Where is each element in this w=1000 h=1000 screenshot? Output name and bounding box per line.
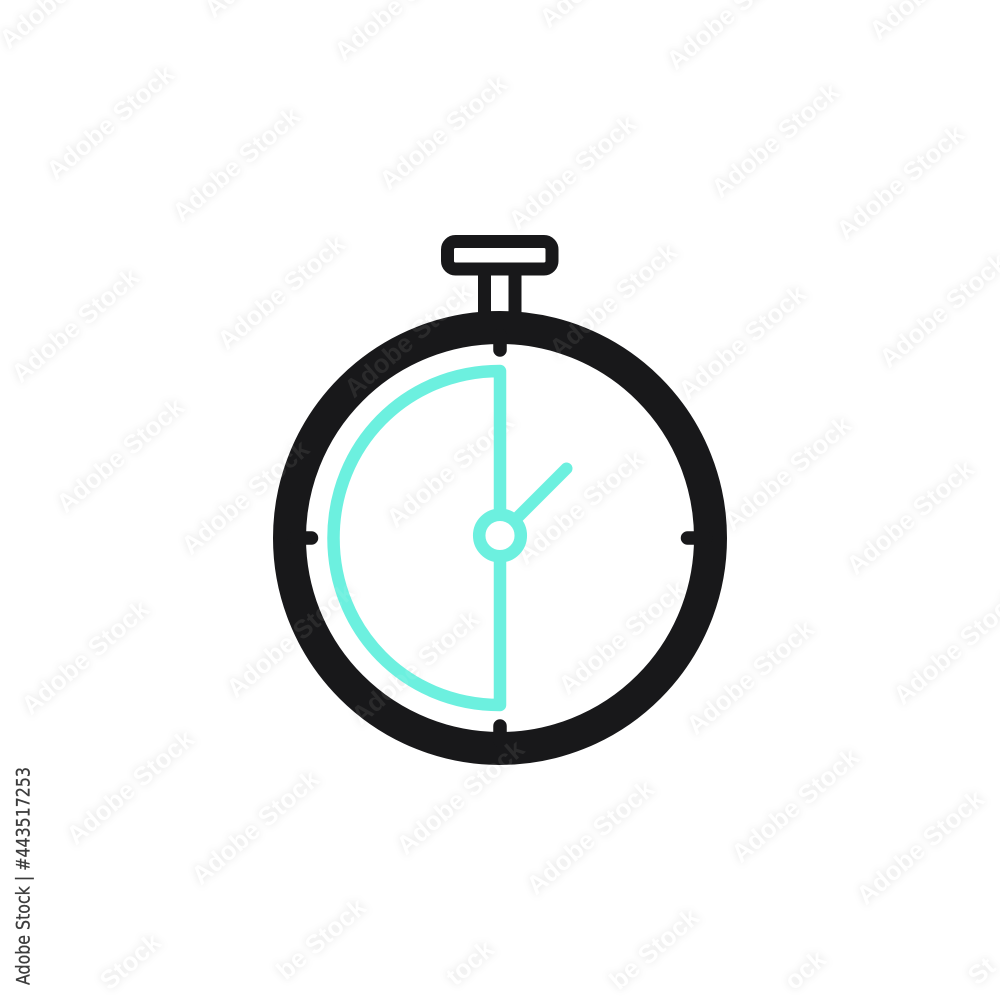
- watermark pattern: Adobe Stock: [338, 276, 478, 403]
- watermark over the icon: [175, 236, 857, 860]
- watermark pattern: Adobe Stock: [60, 723, 200, 850]
- icon: watch case ring: [290, 328, 710, 748]
- watermark over the icon: Adobe Stock: [175, 433, 315, 560]
- watermark pattern: Adobe Stock: [520, 773, 660, 900]
- watermark over the icon: Adobe Stock: [717, 409, 857, 536]
- watermark pattern: be Stock: [603, 901, 705, 995]
- watermark pattern: Adobe Stock: [830, 118, 970, 245]
- watermark pattern: Adobe Stock: [211, 228, 351, 355]
- watermark over the icon: Adobe Stock: [345, 603, 485, 730]
- watermark pattern: Adobe Stock: [220, 576, 360, 703]
- watermark pattern: Adobe Stock: [50, 391, 190, 518]
- watermark pattern: Adobe Stock: [5, 261, 145, 388]
- watermark pattern: ock: [778, 943, 832, 996]
- icon: clock hand: [514, 468, 566, 521]
- icon: crown stem: [484, 272, 515, 320]
- icon: half-dial elapsed sector: [334, 371, 500, 705]
- watermark pattern: Adobe Stock: [840, 453, 980, 580]
- icon: centre hub: [479, 515, 521, 556]
- icon: hour ticks: [294, 335, 706, 741]
- watermark pattern: Adobe Stock: [552, 573, 692, 700]
- watermark pattern: Adobe Stock: [510, 443, 650, 570]
- watermark pattern: Stock: [94, 926, 167, 996]
- watermark over the icon: Adobe Stock: [390, 733, 530, 860]
- watermark pattern: Adobe Stock: [345, 603, 485, 730]
- watermark pattern: Adobe Stock: [373, 68, 513, 195]
- watermark pattern: Adobe Stock: [543, 236, 683, 363]
- watermark pattern: Adobe Stock: [390, 733, 530, 860]
- watermark pattern: Adobe Stock: [705, 76, 845, 203]
- watermark pattern: Adobe Stock: [40, 58, 180, 185]
- watermark pattern: Adobe Stock: [850, 783, 990, 910]
- watermark pattern: St: [962, 951, 1000, 991]
- watermark pattern: Adobe Stock: [725, 741, 865, 868]
- watermark over the icon: Adobe Stock: [220, 576, 360, 703]
- watermark pattern: Adobe Stock: [717, 409, 857, 536]
- watermark pattern: Adobe Stock: [380, 406, 520, 533]
- watermark pattern: Adobe Stock: [185, 763, 325, 890]
- icon: stopwatch: [290, 242, 710, 748]
- icon: crown button: [448, 242, 552, 269]
- watermark pattern: Adobe Stock: [15, 593, 155, 720]
- watermark over the icon: Adobe Stock: [338, 276, 478, 403]
- image id caption: Adobe Stock | #443517253: [14, 767, 34, 985]
- watermark over the icon: Adobe Stock: [543, 236, 683, 363]
- watermark pattern: Adobe Stock: [680, 613, 820, 740]
- watermark pattern: Adobe Stock: [502, 108, 642, 235]
- watermark pattern: be Stock: [270, 891, 372, 985]
- watermark pattern: Adobe Stock: [175, 433, 315, 560]
- watermark pattern: tock: [440, 933, 500, 991]
- watermark pattern: Adobe Stock: [166, 100, 306, 227]
- watermark over the icon: Adobe Stock: [672, 278, 812, 405]
- watermark pattern: Adobe Stock: [672, 278, 812, 405]
